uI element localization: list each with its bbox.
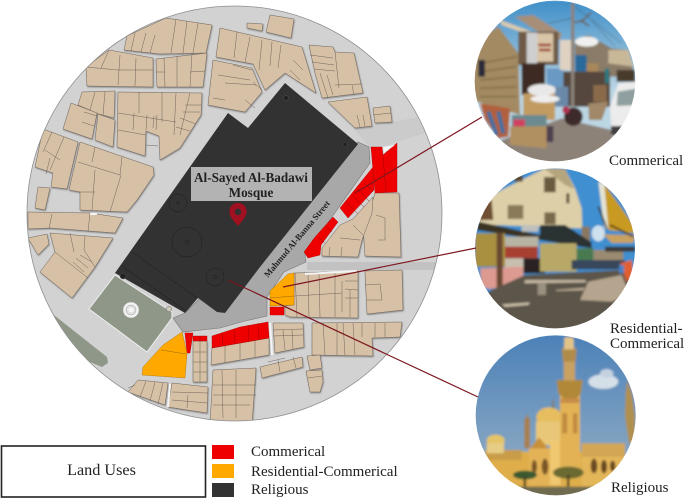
photo: commercial street [472, 0, 638, 167]
mosque name label [191, 167, 312, 201]
building subdivision lines [43, 19, 391, 418]
white corner in commercial plot [383, 145, 395, 153]
mosque name label: Mosque [229, 185, 273, 200]
mosque courtyard [89, 275, 172, 352]
legend title box [2, 446, 206, 497]
icon: location pin [229, 203, 247, 226]
green strip [54, 315, 108, 367]
side road bands [307, 262, 436, 270]
photo: religious mosque [472, 330, 638, 497]
leader line: religious [228, 280, 478, 397]
photo: residential-commercial street [472, 165, 638, 332]
circular site background [27, 6, 442, 421]
photo caption: residential-commercial: Residential- [610, 321, 682, 337]
photo caption: commercial: Commerical [609, 153, 683, 169]
icon: courtyard fountain [123, 302, 139, 318]
photo caption: residential-commercial: Commerical [610, 336, 684, 352]
residential-commercial plots [142, 273, 294, 378]
commercial plots [185, 143, 397, 353]
legend: commercial [212, 444, 325, 460]
legend: religious [212, 482, 309, 498]
leader line: residential-commercial [283, 248, 476, 287]
small courtyard dome [166, 306, 172, 312]
leader line: commercial [355, 117, 482, 193]
street name label: Mahmud Al-Banna Street [262, 198, 332, 279]
Mahmud Al-Banna street [173, 142, 370, 332]
legend title box: Land Uses [67, 461, 136, 479]
map: land use site plan [27, 6, 442, 425]
religious building: Al-Sayed Al-Badawi Mosque [115, 83, 358, 313]
big circle outline [27, 6, 442, 421]
legend: commercial: Commerical [251, 444, 325, 460]
legend: religious: Religious [251, 482, 309, 498]
mosque name label: Al-Sayed Al-Badawi [194, 170, 308, 185]
photo caption: religious: Religious [611, 480, 669, 496]
residential building blocks [28, 15, 403, 425]
white passage gaps [90, 214, 357, 407]
legend: residential-commercial: Residential-Commerical [251, 464, 398, 480]
